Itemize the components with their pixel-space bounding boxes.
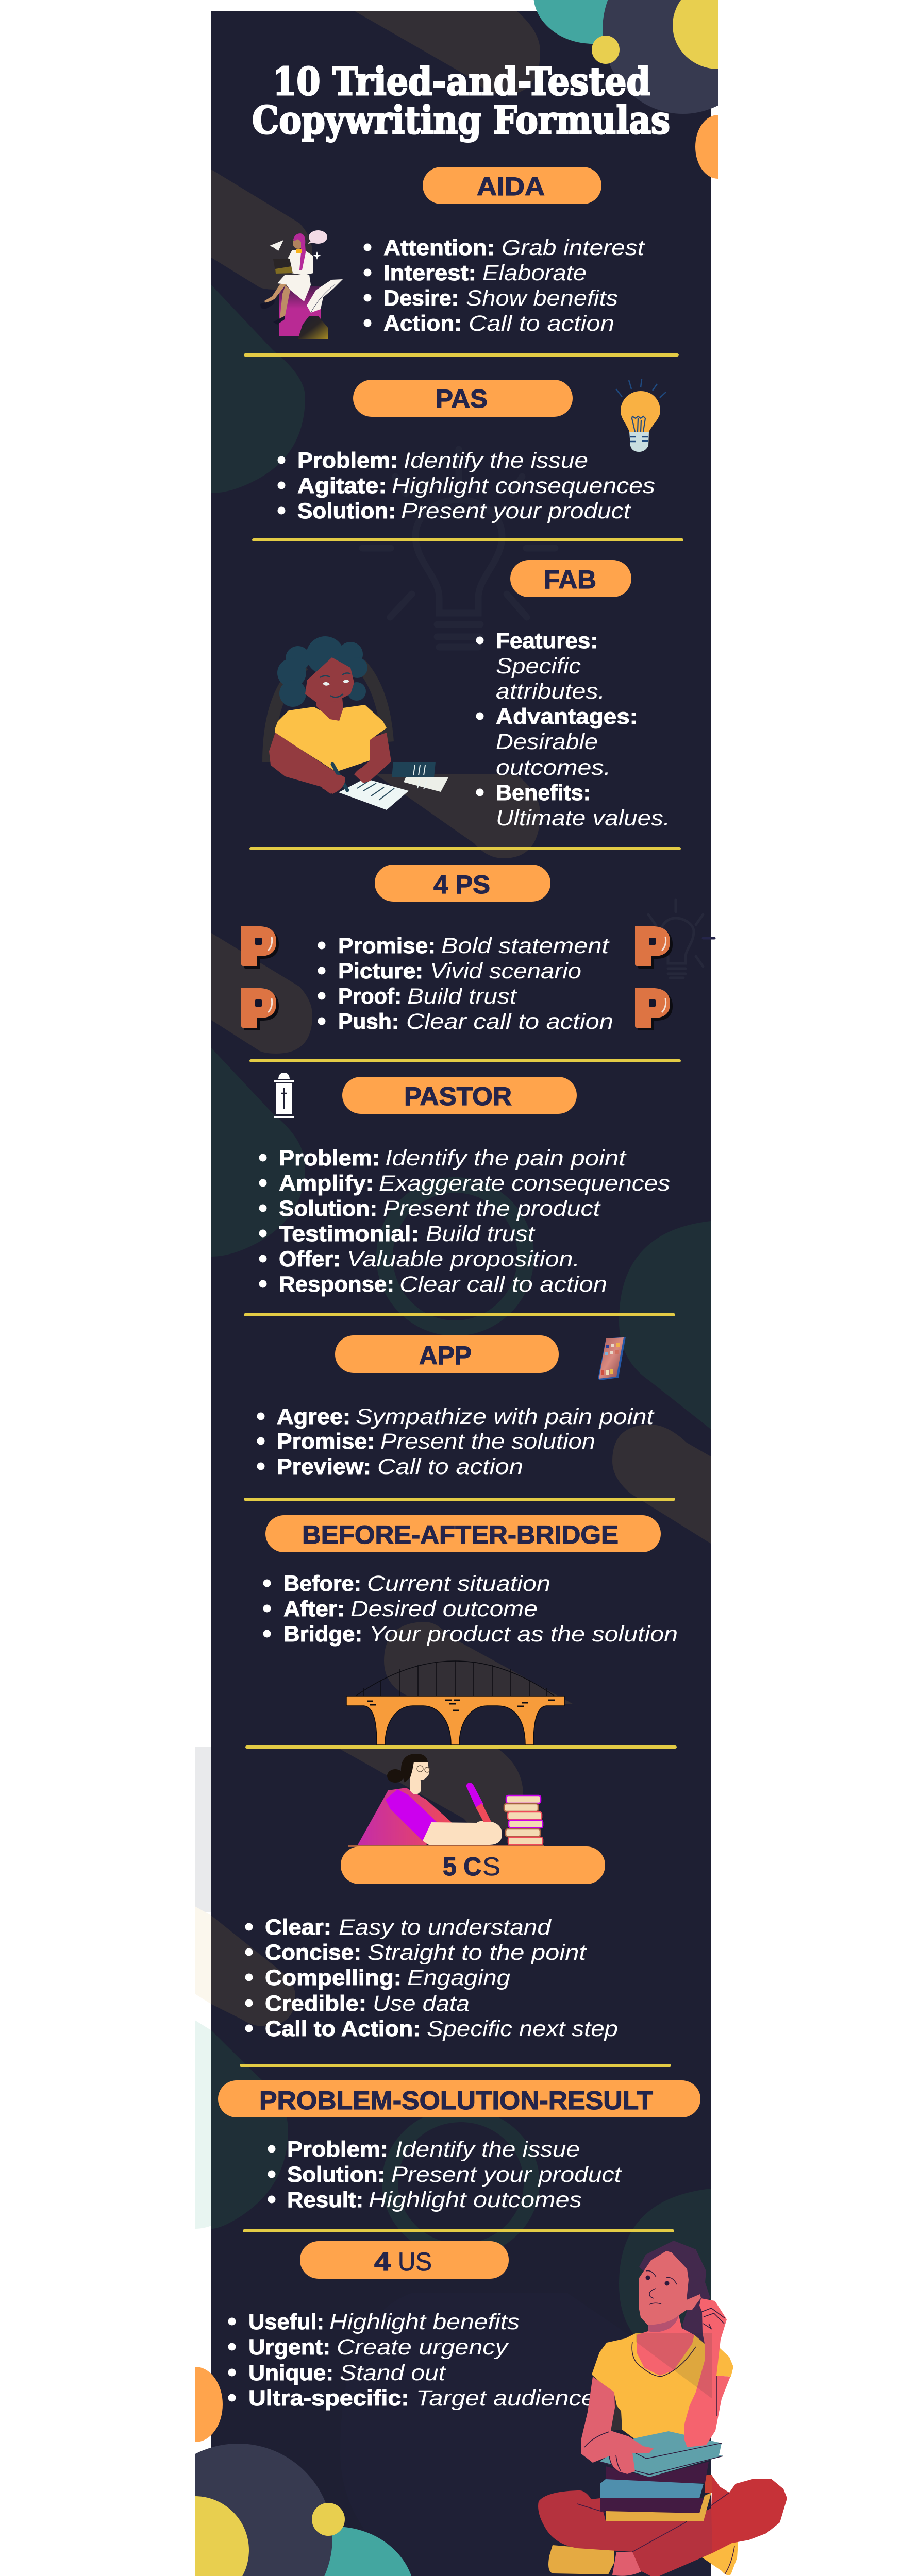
list: Problem-Solution-Result: Problem: <box>287 2137 388 2162</box>
list: 5 Cs <box>245 1915 618 2041</box>
section: 5 Cs <box>240 1754 671 2067</box>
list: 4 Us: Useful: <box>248 2310 324 2334</box>
icon: woman writing with stack of books <box>348 1754 544 1847</box>
list: 4 Ps: Promise: <box>338 934 436 958</box>
heading: 4 Ps <box>375 865 550 902</box>
list: PASTOR: Testimonial: <box>279 1222 419 1246</box>
list: PAS: Solution: <box>297 499 396 523</box>
heading: 5 Cs <box>341 1846 605 1884</box>
list: APP: Agree: <box>277 1404 350 1429</box>
list: Problem-Solution-Result <box>268 2137 622 2212</box>
list: 4 Ps: Push: <box>338 1009 399 1034</box>
list: FAB: Specific <box>496 654 581 679</box>
list: 4 Ps: Build trust <box>407 984 517 1009</box>
list: AIDA <box>364 235 645 336</box>
list: Before-After-Bridge <box>263 1571 678 1647</box>
list: FAB <box>476 629 670 831</box>
list: PASTOR: Solution: <box>279 1196 377 1221</box>
list: 5 Cs: Engaging <box>407 1965 510 1990</box>
title: Copywriting Formulas <box>252 98 670 143</box>
list: APP: Call to action <box>377 1454 523 1479</box>
heading: 5 Cs: S <box>482 1852 500 1881</box>
list: PASTOR: Identify the pain point <box>385 1146 627 1171</box>
list: 4 Ps: Proof: <box>338 984 402 1009</box>
icon: small faint lightbulb watermark <box>648 900 714 978</box>
list: PAS <box>277 448 655 523</box>
list: 5 Cs: Straight to the point <box>367 1940 587 1965</box>
list: Problem-Solution-Result: Highlight outcomes <box>369 2188 582 2212</box>
section: PAS <box>252 379 683 541</box>
heading: PASTOR: PASTOR <box>404 1082 512 1111</box>
decoration: bottom-left circles <box>195 2367 411 2576</box>
list: PASTOR: Problem: <box>279 1146 380 1171</box>
dark background panel <box>211 11 711 2576</box>
list: AIDA: Desire: <box>383 286 459 311</box>
list: AIDA: Call to action <box>469 311 614 336</box>
icon: woman writing at desk <box>269 636 448 810</box>
heading: AIDA: AIDA <box>477 172 545 201</box>
list: FAB: Advantages: <box>496 704 638 729</box>
list: 4 Us: Target audience <box>416 2386 595 2411</box>
list: Problem-Solution-Result: Solution: <box>287 2162 385 2187</box>
title <box>252 60 670 143</box>
list: AIDA: Interest: <box>383 261 476 285</box>
heading: AIDA <box>423 167 601 204</box>
section: PASTOR <box>244 1073 675 1316</box>
decoration: top-right circles <box>534 0 718 179</box>
list: 5 Cs: Easy to understand <box>339 1915 552 1940</box>
icon: arch bridge <box>346 1661 564 1745</box>
icon: woman sitting cross-legged with books <box>538 2241 787 2576</box>
list: 4 Us: Create urgency <box>337 2335 509 2360</box>
heading: Problem-Solution-Result <box>218 2080 700 2117</box>
icon: four letter P blocks <box>241 926 673 1030</box>
list: 5 Cs: Use data <box>373 1991 470 2016</box>
section: Before-After-Bridge <box>245 1515 678 1749</box>
list: PAS: Present your product <box>401 499 631 523</box>
section: AIDA <box>244 167 679 357</box>
list: PAS: Agitate: <box>297 473 387 498</box>
list: PAS: Highlight consequences <box>392 473 655 498</box>
list: 5 Cs: Credible: <box>265 1991 366 2016</box>
icon: lightbulb <box>616 379 666 452</box>
list: FAB: outcomes. <box>496 755 611 780</box>
list: AIDA: Attention: <box>383 235 495 260</box>
heading: FAB: FAB <box>544 565 596 594</box>
heading: PAS: PAS <box>436 384 488 413</box>
icon: woman with laptop on box with quill <box>260 230 343 339</box>
list: Problem-Solution-Result: Result: <box>287 2188 363 2212</box>
list: PASTOR: Clear call to action <box>399 1272 607 1297</box>
list: 5 Cs: Compelling: <box>265 1965 402 1990</box>
list: 4 Us: Highlight benefits <box>329 2310 520 2334</box>
list: Before-After-Bridge: Before: <box>283 1571 361 1596</box>
list: APP <box>257 1404 655 1479</box>
list: 5 Cs: Call to Action: <box>265 2016 421 2041</box>
heading: Before-After-Bridge <box>265 1515 661 1552</box>
panel background shapes <box>211 11 711 2576</box>
list: FAB: Ultimate values. <box>496 806 670 831</box>
list: PASTOR <box>259 1146 670 1297</box>
list: PASTOR: Valuable proposition. <box>347 1247 580 1272</box>
list: 4 Us: Stand out <box>340 2361 446 2385</box>
list: APP: Present the solution <box>380 1429 595 1454</box>
icon: white pillar with cross <box>274 1073 294 1118</box>
list: PASTOR: Response: <box>279 1272 394 1297</box>
icon: faint lightbulb watermark <box>362 449 555 647</box>
list: 4 Ps <box>318 934 613 1034</box>
heading: PASTOR <box>342 1077 577 1114</box>
list: FAB: attributes. <box>496 679 605 704</box>
list: PASTOR: Offer: <box>279 1247 341 1272</box>
section: APP <box>244 1335 675 1501</box>
list: Before-After-Bridge: Bridge: <box>283 1622 362 1647</box>
list: 4 Ps: Clear call to action <box>406 1009 613 1034</box>
list: PASTOR: Exaggerate consequences <box>379 1171 670 1196</box>
list: 4 Ps: Bold statement <box>441 934 610 958</box>
list: Before-After-Bridge: Your product as the solution <box>369 1622 678 1647</box>
heading: APP: APP <box>419 1341 472 1370</box>
list: 4 Ps: Picture: <box>338 959 423 984</box>
list: PAS: Problem: <box>297 448 398 473</box>
list: 4 Ps: Vivid scenario <box>430 959 581 984</box>
list: 5 Cs: Clear: <box>265 1915 331 1940</box>
list: 4 Us: Urgent: <box>248 2335 330 2360</box>
faded background strips behind the panel <box>195 1747 712 2576</box>
list: 4 Us: Ultra-specific: <box>248 2386 409 2411</box>
heading: FAB <box>510 560 631 597</box>
list: Problem-Solution-Result: Identify the issue <box>395 2137 580 2162</box>
list: 5 Cs: Specific next step <box>427 2016 618 2041</box>
list: 4 Us: Unique: <box>248 2361 333 2385</box>
heading: APP <box>335 1335 559 1373</box>
heading: 4 Us: 4 <box>374 2247 391 2276</box>
list: 5 Cs: Concise: <box>265 1940 361 1965</box>
list: Before-After-Bridge: After: <box>283 1597 345 1621</box>
list: PASTOR: Build trust <box>426 1222 536 1246</box>
list: 4 Us <box>228 2310 595 2411</box>
list: APP: Promise: <box>277 1429 375 1454</box>
list: APP: Preview: <box>277 1454 371 1479</box>
heading: Problem-Solution-Result: PROBLEM-SOLUTION-RESULT <box>259 2086 653 2115</box>
list: PAS: Identify the issue <box>404 448 588 473</box>
icon: smartphone <box>598 1337 626 1380</box>
heading: 4 Ps: 4 PS <box>433 870 490 899</box>
list: Problem-Solution-Result: Present your product <box>391 2162 622 2187</box>
list: FAB: Features: <box>496 629 598 653</box>
list: Before-After-Bridge: Desired outcome <box>350 1597 538 1621</box>
list: APP: Sympathize with pain point <box>356 1404 655 1429</box>
heading: Before-After-Bridge: BEFORE-AFTER-BRIDGE <box>302 1520 619 1549</box>
list: AIDA: Action: <box>383 311 462 336</box>
list: FAB: Desirable <box>496 730 598 754</box>
section: Problem-Solution-Result <box>218 2080 700 2232</box>
section: FAB <box>249 560 681 850</box>
section: 4 Ps <box>241 865 681 1062</box>
list: Before-After-Bridge: Current situation <box>367 1571 550 1596</box>
list: PASTOR: Amplify: <box>279 1171 374 1196</box>
list: AIDA: Show benefits <box>466 286 618 311</box>
list: FAB: Benefits: <box>496 781 591 805</box>
title: 10 Tried-and-Tested <box>273 60 650 104</box>
heading: PAS <box>353 380 573 417</box>
list: PASTOR: Present the product <box>383 1196 601 1221</box>
heading: 4 Us: US <box>398 2247 432 2276</box>
list: AIDA: Elaborate <box>482 261 587 285</box>
list: AIDA: Grab interest <box>502 235 645 260</box>
heading: 4 Us <box>300 2241 509 2279</box>
section: 4 Us <box>228 2241 787 2576</box>
heading: 5 Cs: 5 C <box>443 1852 481 1881</box>
